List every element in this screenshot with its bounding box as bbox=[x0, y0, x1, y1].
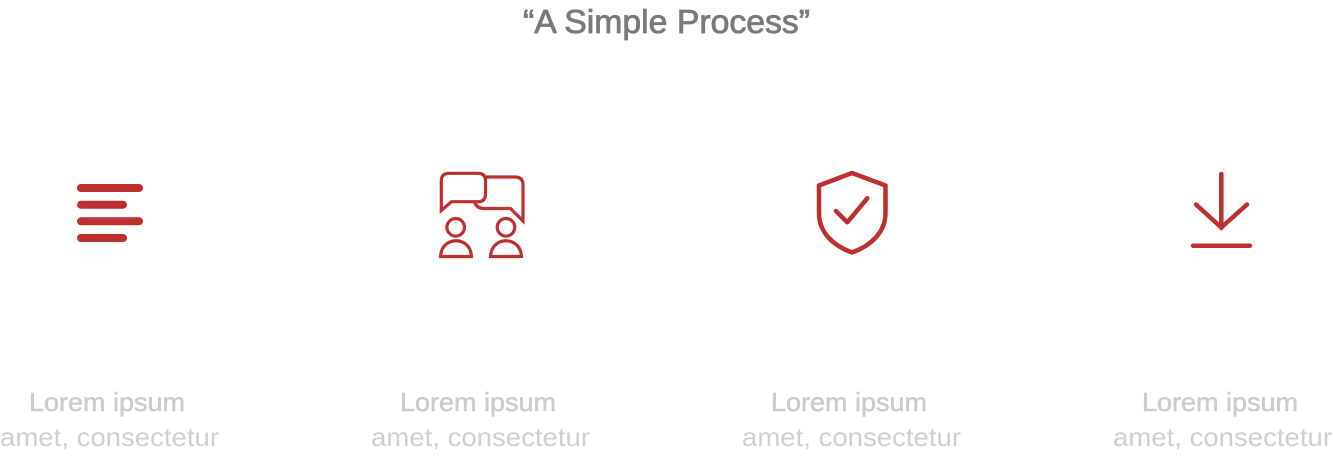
step 1 label: Lorem ipsum bbox=[29, 387, 185, 417]
step 2 bbox=[371, 173, 590, 452]
step 2 label: Lorem ipsum bbox=[400, 387, 556, 417]
icon: two people talking bbox=[440, 173, 523, 256]
step 4 label: Lorem ipsum bbox=[1142, 387, 1298, 417]
step 4 bbox=[1113, 174, 1332, 452]
step 1 label: amet, consectetur bbox=[0, 422, 219, 452]
step 3 label: amet, consectetur bbox=[742, 422, 961, 452]
step 2 label: amet, consectetur bbox=[371, 422, 590, 452]
step 3 label: Lorem ipsum bbox=[771, 387, 927, 417]
step 2 label bbox=[371, 387, 590, 452]
step 3 label bbox=[742, 387, 961, 452]
icon: text lines bbox=[81, 188, 139, 238]
icon: download arrow bbox=[1193, 174, 1250, 246]
icon: shield with check mark bbox=[819, 173, 886, 252]
step 3 bbox=[742, 173, 961, 452]
step 4 label bbox=[1113, 387, 1332, 452]
step 1 label bbox=[0, 387, 219, 452]
step 1 bbox=[0, 188, 219, 452]
step 4 label: amet, consectetur bbox=[1113, 422, 1332, 452]
title: “A Simple Process” bbox=[523, 3, 810, 40]
